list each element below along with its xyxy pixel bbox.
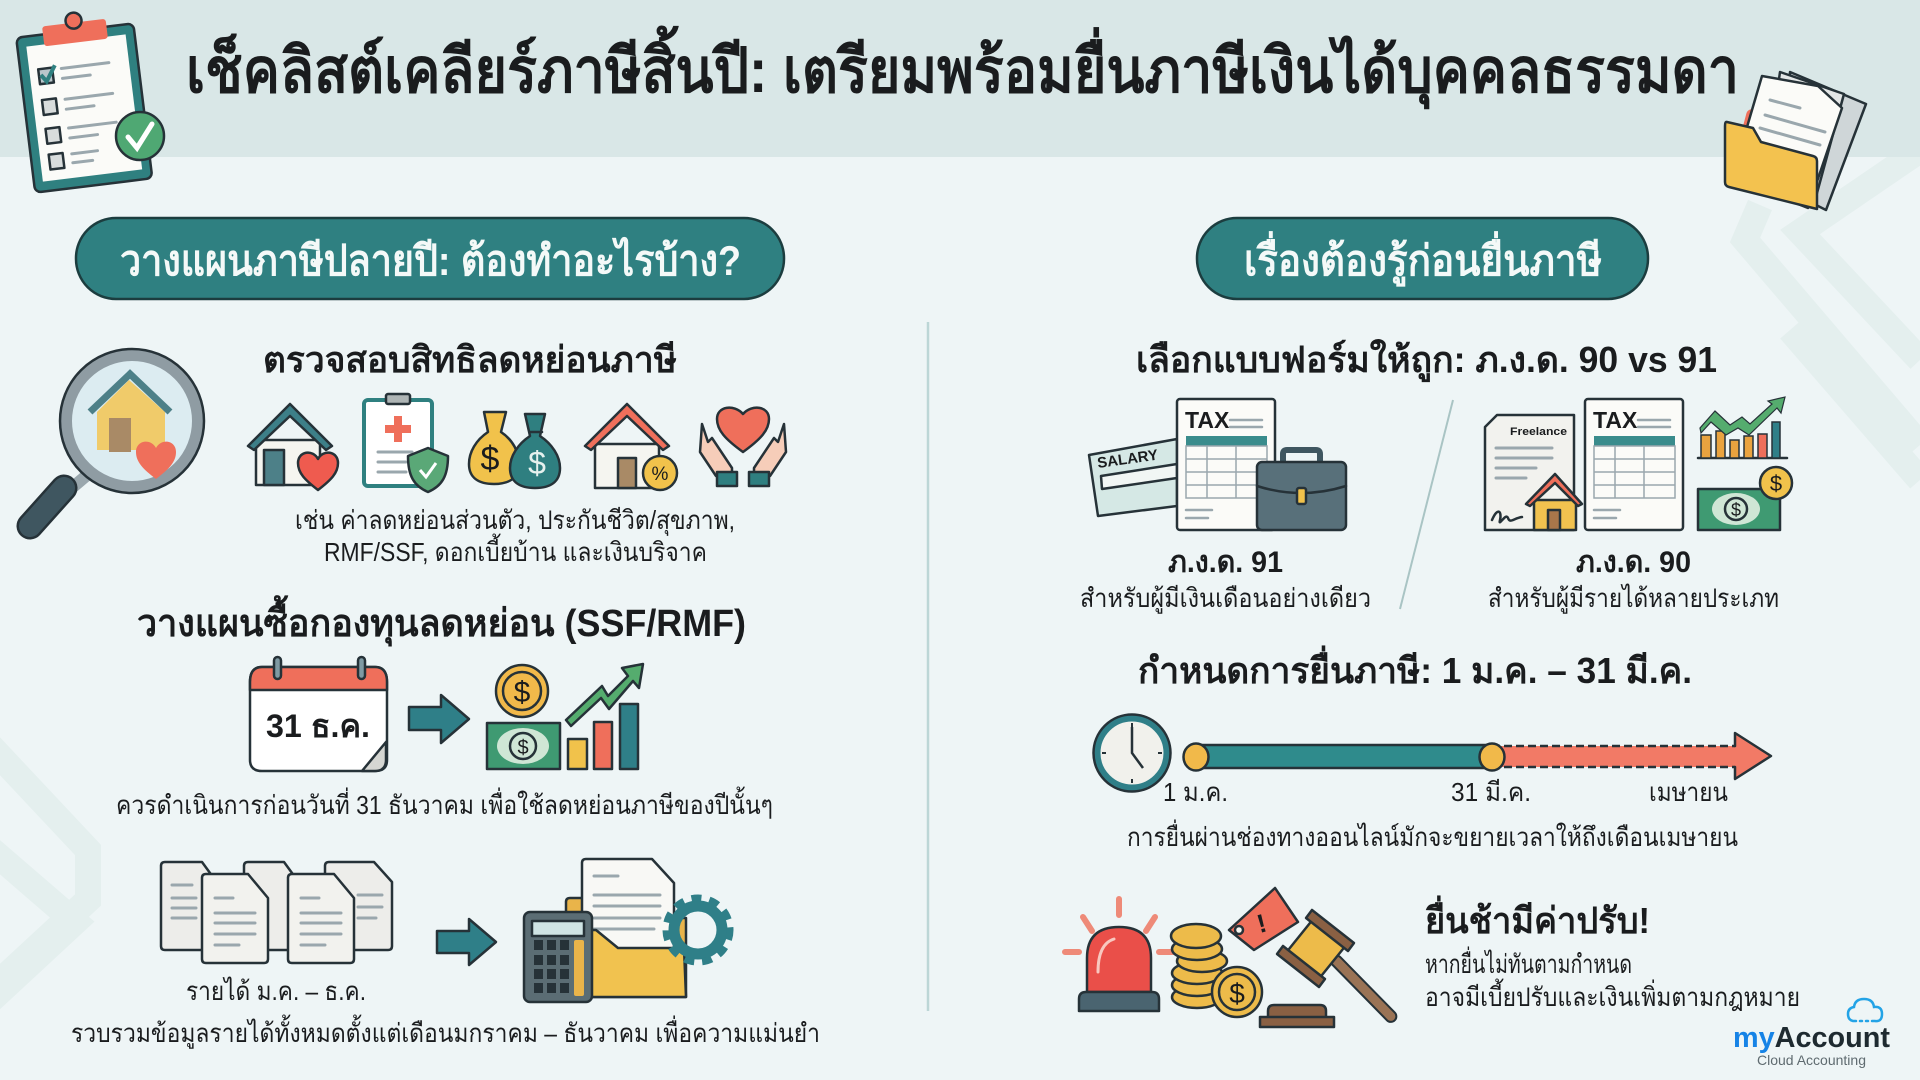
text: deduction examples	[295, 505, 735, 567]
icon: freelance contract, tax form, chart, cash: $	[1731, 500, 1741, 520]
icon: clipboard checklist	[14, 6, 164, 193]
label: form 91: ภ.ง.ด. 91	[1168, 546, 1283, 579]
icon: calculator, folder, gear	[524, 859, 730, 1002]
text: multiple income types: สำหรับผู้มีรายได้หลายประเภท	[1488, 583, 1779, 614]
icon: coin, cash, growth bars: $	[517, 737, 529, 759]
icon: house and heart	[248, 404, 338, 490]
heading: filing deadline: กำหนดการยื่นภาษี: 1 ม.ค. – 31 มี.ค.	[1138, 645, 1692, 691]
section pill: before filing	[1197, 218, 1648, 299]
icon: hands holding heart	[700, 408, 786, 486]
icon: income documents	[161, 862, 392, 963]
icon: salary slip, tax form, briefcase: TAX	[1185, 407, 1230, 433]
logo: myAccount: Cloud Accounting	[1757, 1052, 1866, 1068]
icon: coin, cash, growth bars: $	[514, 676, 531, 709]
logo: myAccount	[1733, 999, 1890, 1068]
icon: clock	[1094, 714, 1170, 792]
icon: freelance contract, tax form, chart, cash: Freelance	[1510, 426, 1567, 438]
icon: calendar 31 Dec	[250, 657, 387, 771]
icon: money bags	[469, 412, 560, 488]
icon: freelance contract, tax form, chart, cash: TAX	[1593, 407, 1638, 433]
icon: freelance contract, tax form, chart, cash	[1485, 397, 1792, 530]
icon: medical clipboard with shield	[364, 394, 448, 492]
icon: freelance contract, tax form, chart, cash: $	[1770, 471, 1782, 496]
label: form 90: ภ.ง.ด. 90	[1576, 546, 1691, 579]
timeline arrow	[1184, 733, 1771, 779]
icon: gavel	[1260, 910, 1399, 1027]
text: penalty details	[1425, 946, 1800, 1012]
logo: myAccount: myAccount	[1733, 1022, 1890, 1054]
label: 1 Jan: 1 ม.ค.	[1163, 777, 1228, 807]
icon: magnifier over house	[30, 349, 204, 526]
text: penalty details: อาจมีเบี้ยปรับและเงินเพิ่มตามกฎหมาย	[1425, 978, 1800, 1012]
text: gather all income data: รวบรวมข้อมูลรายได้ทั้งหมดตั้งแต่เดือนมกราคม – ธันวาคม เพื่อความแม่นยำ	[71, 1014, 820, 1049]
header band	[0, 0, 1920, 157]
text: deduction examples: RMF/SSF, ดอกเบี้ยบ้าน และเงินบริจาค	[324, 533, 707, 567]
text: salary only: สำหรับผู้มีเงินเดือนอย่างเดียว	[1080, 583, 1371, 614]
section pill: year-end tax planning: วางแผนภาษีปลายปี: ต้องทำอะไรบ้าง?	[120, 236, 741, 284]
section pill: year-end tax planning	[76, 218, 784, 299]
icon: salary slip, tax form, briefcase	[1089, 399, 1346, 530]
heading: choose form: เลือกแบบฟอร์มให้ถูก: ภ.ง.ด. 90 vs 91	[1136, 338, 1717, 383]
icon: coins and penalty tag	[1171, 888, 1298, 1017]
text: penalty details: หากยื่นไม่ทันตามกำหนด	[1425, 946, 1632, 979]
icon: coins and penalty tag: $	[1229, 978, 1245, 1009]
icon: money bags: $	[528, 445, 546, 481]
column divider	[927, 322, 929, 1011]
icon: money bags: $	[481, 440, 500, 478]
panel: right column	[1065, 218, 1800, 1027]
icon: folder with documents	[1725, 72, 1866, 210]
icon: house with percent	[585, 404, 677, 490]
label: 31 Mar: 31 มี.ค.	[1451, 777, 1531, 807]
icon: siren	[1065, 899, 1173, 1011]
icon: coins and penalty tag: !	[1254, 908, 1270, 939]
title: เช็คลิสต์เคลียร์ภาษีสิ้นปี: เตรียมพร้อมยื่นภาษีเงินได้บุคคลธรรมดา	[186, 25, 1739, 109]
heading: late filing penalty: ยื่นช้ามีค่าปรับ!	[1425, 895, 1650, 941]
slanted divider	[1400, 400, 1453, 609]
text: online filing extension: การยื่นผ่านช่องทางออนไลน์มักจะขยายเวลาให้ถึงเดือนเมษายน	[1127, 819, 1738, 852]
text: act before 31 December: ควรดำเนินการก่อนวันที่ 31 ธันวาคม เพื่อใช้ลดหย่อนภาษีของปีนั้นๆ	[116, 786, 773, 820]
heading: SSF RMF funds: วางแผนซื้อกองทุนลดหย่อน (SSF/RMF)	[137, 595, 746, 647]
icon: coin, cash, growth bars	[487, 664, 643, 769]
arrow: calendar to savings	[409, 695, 469, 743]
section pill: before filing: เรื่องต้องรู้ก่อนยื่นภาษี	[1244, 231, 1602, 287]
icon: salary slip, tax form, briefcase: SALARY	[1096, 447, 1159, 472]
heading: check deductions: ตรวจสอบสิทธิลดหย่อนภาษี	[263, 339, 677, 380]
text: income Jan to Dec: รายได้ ม.ค. – ธ.ค.	[186, 976, 366, 1006]
arrow: documents to accounting	[437, 919, 496, 965]
icon: house with percent: %	[652, 464, 669, 485]
label: April: เมษายน	[1649, 777, 1728, 807]
panel: left column	[30, 218, 820, 1049]
text: deduction examples: เช่น ค่าลดหย่อนส่วนตัว, ประกันชีวิต/สุขภาพ,	[295, 505, 735, 536]
icon: calendar 31 Dec: 31 ธ.ค.	[266, 708, 370, 744]
